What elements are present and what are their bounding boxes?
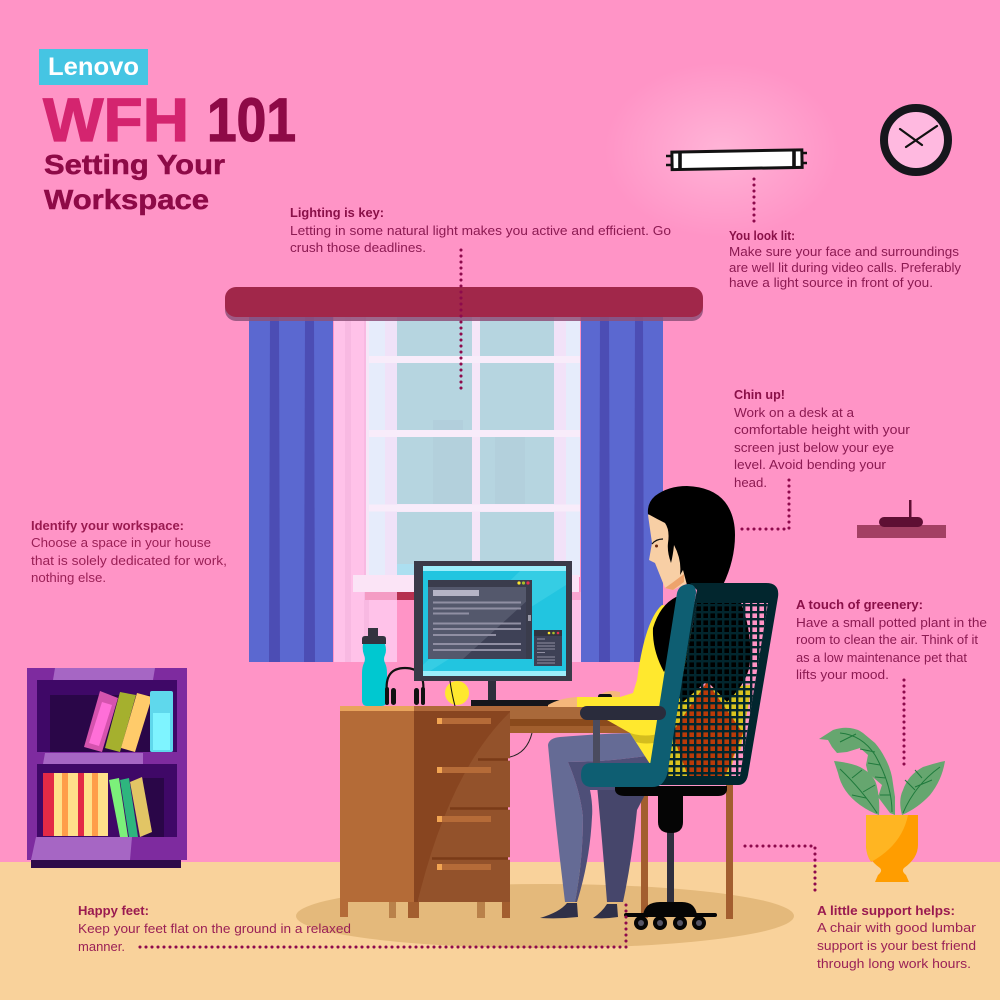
chair back frame (660, 583, 778, 785)
person (540, 486, 735, 918)
front leg shade (568, 755, 660, 902)
text: happy feet: Keep your feet flat on the ground in a relaxed (78, 921, 351, 936)
shirt (577, 605, 695, 764)
desk (340, 706, 733, 919)
title: 101 (207, 86, 296, 154)
chair base (624, 902, 717, 930)
hand front (548, 697, 577, 707)
shirt shade (630, 733, 662, 744)
chair (580, 583, 778, 930)
desk legs (340, 785, 733, 919)
text: chin up: Chin up! (734, 387, 785, 402)
back leg (597, 785, 650, 902)
text: a touch of greenery: lifts your mood. (796, 667, 889, 682)
dotted leader: greenery (902, 680, 906, 766)
text: lighting is key: Letting in some natural light makes you active and efficient. Go (290, 223, 671, 238)
icon: fluorescent tube light (666, 150, 807, 170)
title: WFH (43, 86, 189, 154)
text: lighting is key: Lighting is key: (290, 205, 384, 220)
text: a little support helps: through long work hours. (817, 956, 971, 971)
text: you look lit (729, 228, 962, 290)
text: you look lit: Make sure your face and surroundings (729, 244, 960, 259)
text: chin up: comfortable height with your (734, 422, 911, 437)
title: Setting Your (44, 149, 225, 180)
text: you look lit: You look lit: (729, 228, 795, 243)
icon: headphones (385, 668, 425, 705)
dotted leader: happy feet (140, 903, 626, 947)
text: identify your workspace: Identify your workspace: (31, 518, 184, 533)
chair underside (615, 786, 727, 796)
icon: water bottle (362, 628, 387, 706)
books: bottom shelf (43, 773, 152, 837)
window (353, 317, 580, 592)
feet (540, 903, 618, 918)
floor (0, 862, 1000, 1000)
front leg (548, 733, 652, 902)
chair column (658, 796, 683, 905)
text: chin up: Work on a desk at a (734, 405, 855, 420)
chair upright (640, 584, 696, 785)
chair seat (581, 763, 666, 787)
text: a touch of greenery: as a low maintenance pet that (796, 650, 967, 665)
light glow (604, 62, 840, 238)
text: a little support helps: A chair with good lumbar (817, 920, 977, 935)
curtain: left blue (249, 317, 333, 662)
text: identify your workspace (31, 518, 227, 585)
text: happy feet: manner. (78, 939, 125, 954)
icon: wall clock (884, 108, 948, 172)
logo: Lenovo: Lenovo (48, 53, 139, 81)
text: you look lit: have a light source in front of you. (729, 275, 933, 290)
text: happy feet (78, 903, 351, 954)
desk drawers (340, 706, 510, 902)
text: lighting is key (290, 205, 671, 255)
monitor (414, 561, 572, 706)
text: a little support helps: A little support helps: (817, 903, 955, 918)
hand back and mouse (598, 691, 620, 699)
leaf veins (840, 733, 940, 813)
neck shadow (665, 574, 684, 590)
text: lighting is key: crush those deadlines. (290, 240, 426, 255)
dotted leader: you look lit (752, 179, 756, 226)
text: identify your workspace: nothing else. (31, 570, 106, 585)
text: a little support helps: support is your best friend (817, 938, 976, 953)
screen window: main (428, 580, 532, 659)
pot highlight (866, 815, 908, 862)
text: a touch of greenery: A touch of greenery: (796, 597, 923, 612)
eye and brow (652, 539, 663, 548)
lower hair (653, 597, 690, 672)
chair arm post (593, 720, 600, 765)
text: identify your workspace: that is solely dedicated for work, (31, 553, 227, 568)
icon: wall shelf with router (857, 500, 946, 538)
text: chin up: head. (734, 475, 767, 490)
text: a touch of greenery (796, 597, 987, 682)
curtain: left sheer (334, 317, 581, 662)
text: you look lit: are well lit during video calls. Preferably (729, 260, 962, 275)
hair (648, 486, 735, 585)
desk top extension (510, 706, 634, 757)
chair back mesh (666, 603, 768, 776)
text: chin up: screen just below your eye (734, 440, 894, 455)
curtain: right blue (581, 317, 663, 662)
icon: yellow mouse ball (445, 681, 469, 705)
curtain rod (225, 287, 703, 321)
text: chin up (734, 387, 911, 490)
screen window: small (534, 630, 562, 666)
text: a little support helps (817, 903, 977, 971)
chair armrest (580, 706, 666, 720)
text: happy feet: Happy feet: (78, 903, 149, 918)
face (648, 505, 690, 590)
dotted leader: chin up (741, 480, 789, 529)
cable (450, 681, 455, 706)
text: a touch of greenery: room to clean the air. Think of it (796, 632, 978, 647)
title (43, 86, 296, 215)
text: chin up: level. Avoid bending your (734, 457, 887, 472)
plant (819, 728, 945, 882)
floor rug (296, 884, 794, 948)
books: top shelf (84, 691, 173, 752)
pot (866, 815, 918, 882)
title: Workspace (44, 184, 209, 215)
dotted leader: lighting (459, 250, 463, 391)
bookshelf (27, 668, 187, 868)
text: identify your workspace: Choose a space in your house (31, 535, 211, 550)
logo: Lenovo (39, 49, 148, 85)
dotted leader: support (745, 846, 815, 895)
leaves (819, 728, 945, 815)
text: a touch of greenery: Have a small potted plant in the (796, 615, 987, 630)
